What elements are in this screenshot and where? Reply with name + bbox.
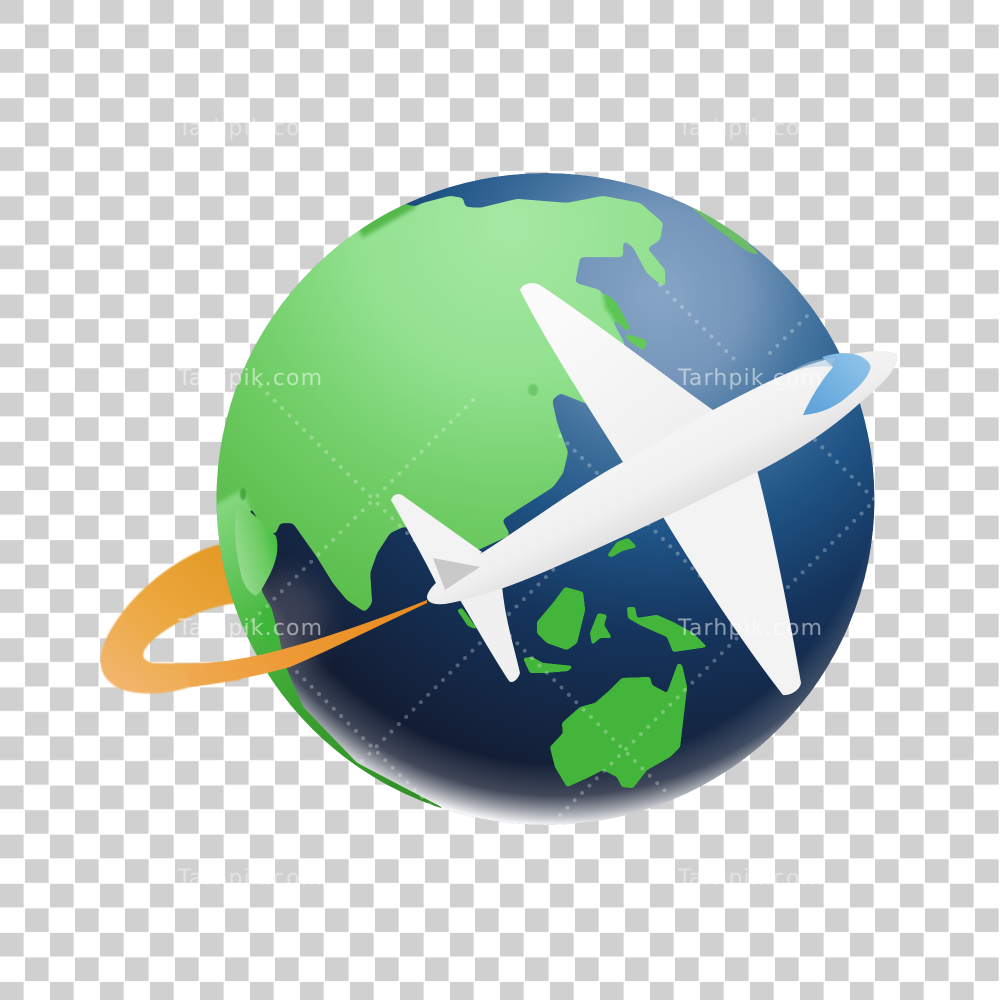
watermark texts: Tarhpik.com: [677, 116, 822, 141]
Asia main continent: [190, 196, 665, 612]
dimple: [528, 384, 538, 396]
orange flight trail: rear loop: [101, 545, 256, 693]
lower wing: [660, 470, 801, 695]
lower left grey sheen: [245, 575, 325, 665]
lower left green bump: [260, 600, 280, 644]
small island near wing: [623, 333, 647, 351]
upper wing: [520, 283, 720, 470]
top right edge land: [687, 203, 764, 258]
New Guinea-like island: [627, 607, 707, 652]
island near tail: [458, 608, 476, 628]
cockpit glass upper glare: [790, 358, 835, 372]
orange flight trail: front: [186, 600, 427, 687]
watermark texts: Tarhpik.com: [177, 866, 322, 891]
dotted watermark lines: [245, 285, 880, 835]
watermark texts: Tarhpik.com: [177, 366, 322, 391]
watermark texts: Tarhpik.com: [677, 616, 822, 641]
crevice shadow: [240, 488, 246, 500]
island below fuselage: [608, 538, 636, 557]
watermark texts: [177, 116, 822, 891]
continents: [190, 196, 764, 830]
tail stabilizer grey wedge: [433, 558, 480, 590]
islands: [457, 538, 707, 788]
ocean sphere: [216, 173, 874, 825]
Australia: [550, 663, 687, 788]
small island center: [590, 614, 611, 644]
watermark texts: Tarhpik.com: [677, 866, 822, 891]
watermark texts: Tarhpik.com: [677, 366, 822, 391]
Africa-like raised landmass: [235, 503, 277, 596]
airplane: [391, 283, 898, 695]
Korea-like island: [603, 292, 630, 332]
vertical tail fin: [391, 494, 482, 590]
Borneo-like island: [537, 587, 585, 650]
globe: [190, 172, 880, 835]
watermark texts: Tarhpik.com: [177, 116, 322, 141]
fuselage: [427, 351, 898, 604]
Java-like island: [523, 657, 573, 673]
bottom edge fade: [220, 548, 870, 825]
upper left sliver island: [360, 203, 417, 238]
lower tail stabilizer: [460, 585, 520, 682]
cockpit window: [803, 353, 871, 415]
left coast strip landmass: [216, 490, 442, 808]
watermark texts: Tarhpik.com: [177, 616, 322, 641]
